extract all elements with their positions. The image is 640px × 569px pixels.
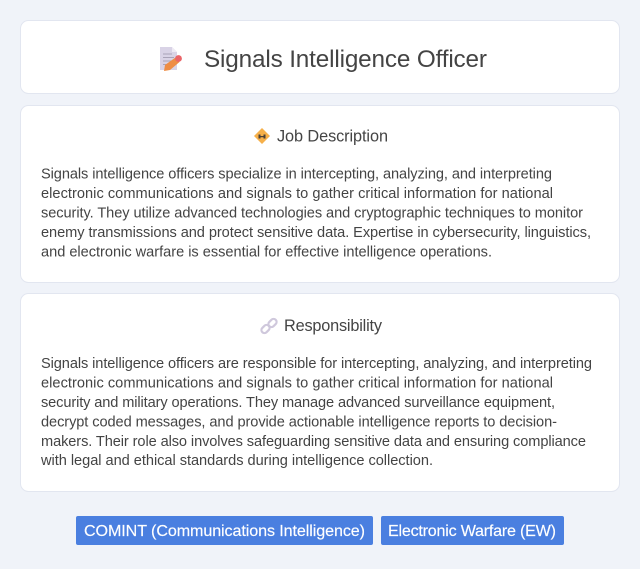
icon: chain link [260,318,278,334]
tag: COMINT [76,516,373,545]
tag: Electronic Warfare [381,516,564,545]
heading: page title: Signals Intelligence Officer [204,46,487,73]
panel: responsibility [20,294,620,492]
icon: orange diamond [254,128,270,144]
text: responsibility body: Signals intelligence officers are responsible for intercepting, analyzing, and interpreting [41,356,592,372]
text: job description body: Signals intelligence officers specialize in intercepting, analyzing, and interpreting [41,166,552,182]
text: responsibility body: decrypt coded messages, and provide actionable intelligence reports to decision- [41,414,557,430]
text: job description body: electronic communications and signals to gather critical information for national [41,186,553,202]
panel: title [20,20,620,94]
text: job description body: enemy transmissions and protect sensitive data. Expertise in cybersecurity, linguistics, [41,225,591,241]
text: job description body: security. They utilize advanced technologies and cryptographic techniques to monitor [41,206,583,222]
text: job description body [41,166,591,260]
text: job description body: and electronic warfare is essential for effective intelligence operations. [41,244,492,260]
heading: responsibility: Responsibility [284,317,383,335]
tag: Electronic Warfare: Electronic Warfare (EW) [388,522,556,540]
text: responsibility body [40,356,592,469]
tag: COMINT: COMINT (Communications Intelligence) [84,522,365,540]
panel: job description [20,106,620,282]
text: responsibility body: security and military operations. They manage advanced surveillance equipment, [41,395,555,411]
text: responsibility body: makers. Their role also involves safeguarding sensitive data and ensuring compliance [41,434,586,450]
text: responsibility body: with legal and ethical standards during intelligence collection. [40,453,433,469]
text: responsibility body: electronic communications and signals to gather critical information for national [41,376,553,392]
icon: document with pencil [160,47,182,71]
heading: job description: Job Description [277,128,388,146]
